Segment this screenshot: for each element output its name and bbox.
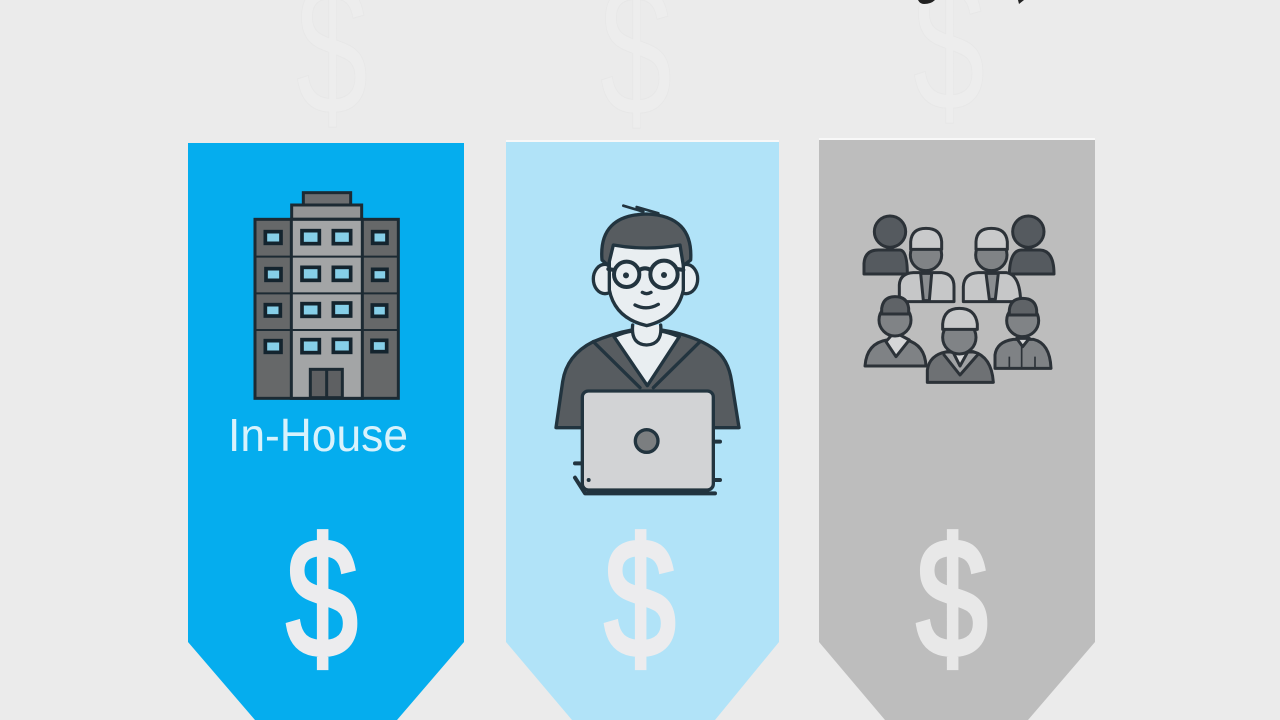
icon: group of workers xyxy=(864,216,1054,382)
back right person xyxy=(1009,216,1054,274)
back left person xyxy=(864,216,907,274)
lower centre worker xyxy=(927,308,993,382)
lower left worker xyxy=(865,297,926,366)
dollar sign: freelancer: $ xyxy=(604,504,676,692)
cropped title fragments at top edge xyxy=(918,0,1024,4)
panel: team xyxy=(819,138,1095,720)
icon: person with laptop xyxy=(556,206,739,493)
top right worker xyxy=(963,228,1021,302)
icon: office building xyxy=(255,193,398,398)
dollar sign: team: $ xyxy=(916,504,988,692)
lower right worker xyxy=(995,298,1051,368)
panel: in-house xyxy=(188,143,464,720)
label: In-House: In-House xyxy=(228,409,408,461)
panel: freelancer xyxy=(506,140,779,720)
top left worker xyxy=(899,228,954,302)
dollar sign: in-house: $ xyxy=(286,504,358,692)
